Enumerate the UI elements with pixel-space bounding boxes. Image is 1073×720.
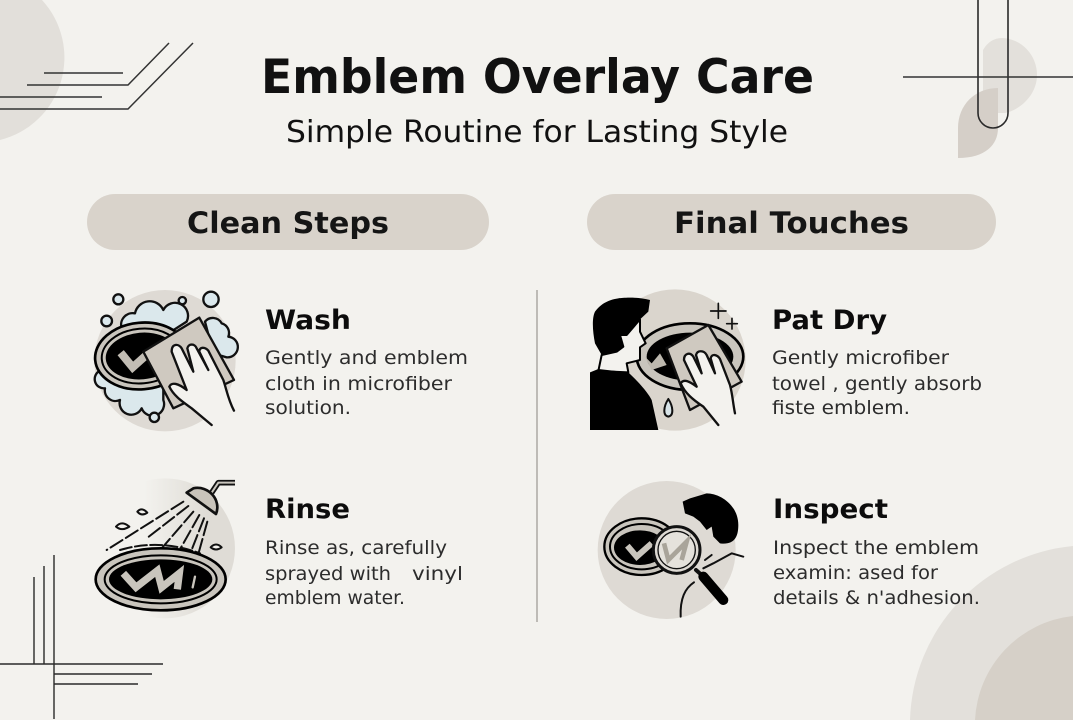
icon: pat dry	[590, 289, 746, 431]
step: Rinse: sprayed with	[265, 563, 391, 585]
step: Inspect: Inspect	[773, 494, 888, 525]
decoration: bottom-right circles	[910, 546, 1073, 720]
title: Emblem Overlay Care	[261, 50, 814, 105]
step: Inspect	[773, 494, 980, 609]
panel header: Final Touches	[587, 194, 996, 250]
step: Pat Dry: Pat Dry	[772, 305, 887, 336]
decoration: top-left shapes and lines	[0, 0, 193, 140]
step: Pat Dry: fiste emblem.	[772, 397, 910, 419]
icon: wash	[92, 290, 238, 431]
panel header: Final Touches: Final Touches	[674, 206, 909, 240]
step: Wash: solution.	[265, 397, 351, 419]
step: Pat Dry: Gently microfiber	[772, 347, 949, 369]
step: Pat Dry: towel , gently absorb	[772, 373, 982, 395]
center divider	[536, 290, 538, 622]
step: Rinse: Rinse as, carefully	[265, 537, 447, 559]
step: Pat Dry	[772, 305, 982, 419]
step: Wash	[265, 305, 468, 419]
step: Inspect: details & n'adhesion.	[773, 587, 980, 609]
subtitle: Simple Routine for Lasting Style	[286, 115, 788, 150]
step: Rinse: Rinse	[265, 494, 350, 525]
step: Wash: Wash	[265, 305, 351, 336]
step: Wash: Gently and emblem	[265, 347, 468, 369]
decoration: bottom-left lines	[0, 555, 163, 719]
panel header: Clean Steps: Clean Steps	[187, 206, 389, 240]
step: Rinse: emblem water.	[265, 587, 405, 609]
icon: rinse	[95, 478, 235, 618]
step: Inspect: examin: ased for	[773, 562, 938, 584]
decoration: top-right shapes and lines	[903, 0, 1073, 158]
step: Wash: cloth in microfiber	[265, 373, 452, 395]
step: Rinse	[265, 494, 463, 609]
panel header: Clean Steps	[87, 194, 489, 250]
icon: inspect	[598, 481, 743, 619]
step: Inspect: Inspect the emblem	[773, 537, 979, 559]
step: Rinse: vinyl	[412, 563, 463, 585]
